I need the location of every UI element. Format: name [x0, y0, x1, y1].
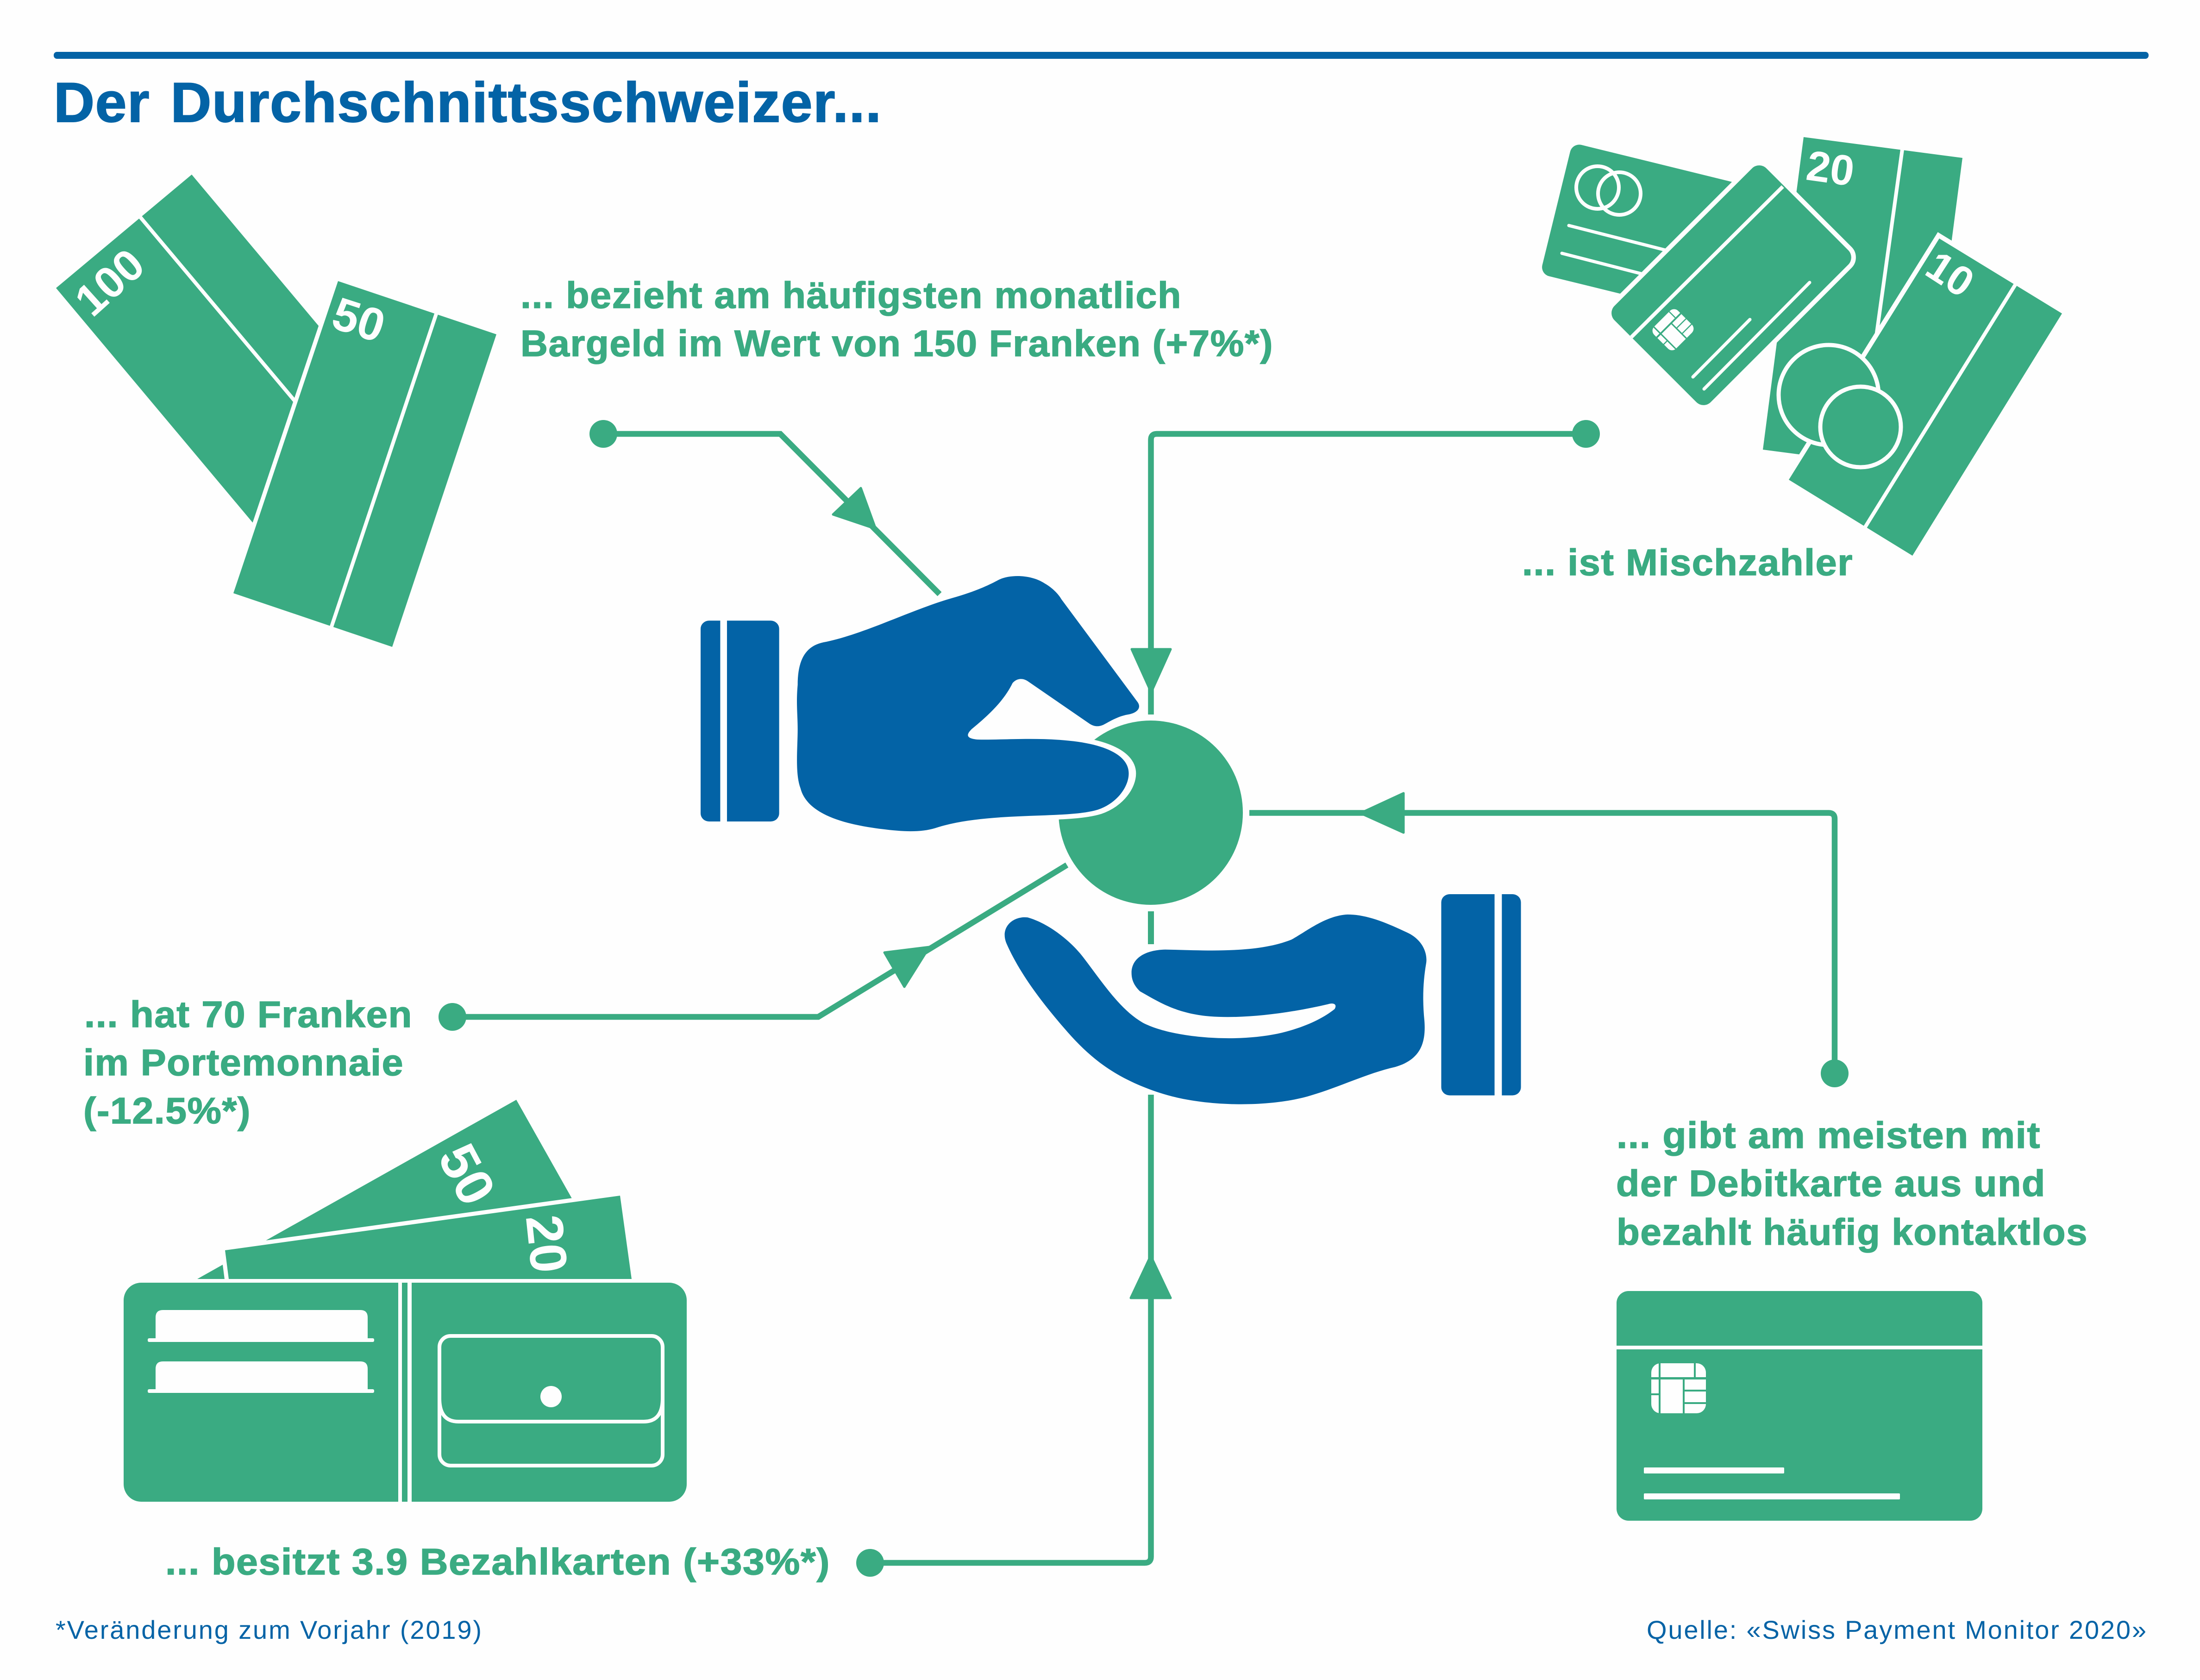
back credit card [1540, 143, 1779, 325]
text: debit card usage: ... gibt am meisten mit [1617, 1115, 2041, 1156]
banknote 50 [233, 281, 496, 647]
icon: top hand giving coin [701, 576, 1139, 831]
text: amount in wallet: im Portemonnaie [83, 1042, 404, 1083]
title rule [54, 52, 2149, 59]
cuff [1441, 891, 1521, 1098]
arrow: wallet connector [439, 865, 1067, 1031]
banknote 50 in wallet: 50 [427, 1135, 507, 1215]
card number lines [1644, 1467, 1900, 1499]
text: number of cards: ... besitzt 3.9 Bezahlkarten (+33%*) [165, 1541, 830, 1582]
text: cash withdrawal: ... bezieht am häufigsten monatlich [520, 275, 1182, 316]
text: amount in wallet [83, 994, 413, 1131]
cuff [701, 619, 779, 824]
card slots [148, 1310, 374, 1393]
banknote 10 [1789, 238, 2062, 556]
footnote: *Veränderung zum Vorjahr (2019) [56, 1615, 482, 1644]
banknote 20 in wallet: 20 [515, 1212, 578, 1276]
front credit card [1607, 161, 1855, 409]
wallet body [124, 1283, 687, 1502]
coin pocket [439, 1336, 663, 1466]
text: debit card usage: bezahlt häufig kontaktlos [1617, 1211, 2088, 1253]
text: cash withdrawal: Bargeld im Wert von 150 Franken (+7%*) [520, 323, 1273, 364]
icon: banknotes 100 and 50 [56, 175, 496, 647]
arrow: cash withdrawal connector [589, 420, 940, 594]
text: cash withdrawal [520, 275, 1273, 364]
banknote 50: 50 [326, 288, 391, 352]
coins [1779, 345, 1901, 467]
hand [1005, 915, 1426, 1104]
banknote 20: 20 [1804, 142, 1857, 195]
arrow: cards count connector [856, 911, 1171, 1577]
text: mixed payer: ... ist Mischzahler [1522, 542, 1853, 583]
card text lines [1562, 226, 1667, 274]
card chip [1651, 1363, 1706, 1413]
icon: bottom hand receiving coin [1005, 891, 1521, 1104]
hand [797, 576, 1139, 831]
banknote 20 in wallet [225, 1196, 632, 1279]
text: amount in wallet: (-12.5%*) [83, 1090, 251, 1131]
icon: mixed cards, notes and coins [1540, 137, 2062, 556]
banknote 10: 10 [1918, 242, 1982, 307]
arrow: mixed payer connector [1132, 420, 1600, 715]
banknote 100 [56, 175, 324, 523]
text: amount in wallet: ... hat 70 Franken [84, 994, 413, 1035]
icon: wallet with banknotes [124, 1100, 687, 1502]
text: debit card usage [1616, 1115, 2088, 1253]
banknote 50 in wallet [197, 1100, 617, 1279]
arrow: debit card connector [1249, 793, 1849, 1087]
title: Der Durchschnittsschweizer... [54, 71, 881, 134]
card logo circles [1576, 166, 1641, 215]
icon: debit card [1617, 1291, 1982, 1521]
icon: coin [1059, 721, 1243, 905]
banknote 20 [1763, 137, 1962, 470]
banknote 100: 100 [66, 239, 154, 326]
text: debit card usage: der Debitkarte aus und [1616, 1163, 2046, 1204]
source: Quelle: «Swiss Payment Monitor 2020» [1647, 1615, 2146, 1644]
